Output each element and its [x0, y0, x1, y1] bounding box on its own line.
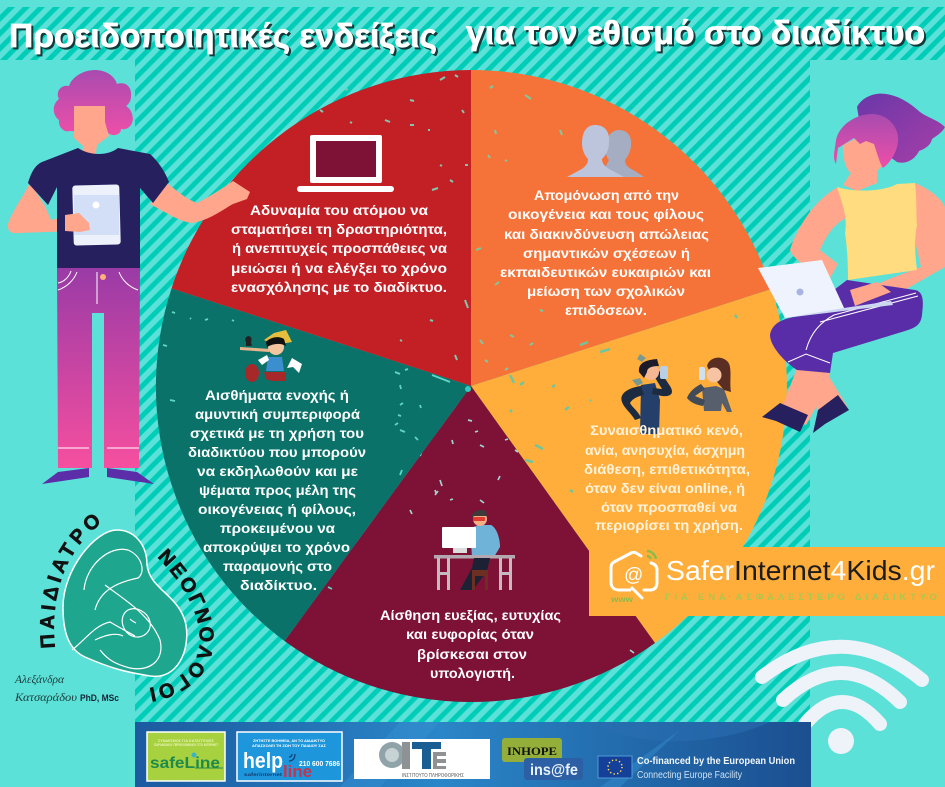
text: red slice: ενασχόλησης με το διαδίκτυο. — [231, 280, 447, 295]
logo: helpline: 210 600 7686 — [299, 759, 340, 768]
logo: helpline: ΖΗΤΗΣΤΕ ΒΟΗΘΕΙΑ, ΑΝ ΤΟ ΔΙΑΔΙΚΤΥΟ — [253, 738, 325, 743]
logo: insafe: ins@fe — [530, 762, 578, 779]
text: co-financing statement — [637, 755, 795, 781]
logo: paediatrician neonatologist: PhD, MSc — [80, 693, 119, 703]
title: Προειδοποιητικές ενδείξεις — [9, 17, 437, 54]
text: red slice: ή ανεπιτυχείς προσπάθειες να — [232, 241, 448, 256]
text: yellow slice: διάθεση, επιθετικότητα, — [584, 462, 750, 477]
logo: safeline: safeLine — [150, 755, 220, 772]
text: teal slice: αμυντική συμπεριφορά — [195, 407, 361, 422]
text: red slice: σταματήσει τη δραστηριότητα, — [231, 222, 447, 237]
logo: safeline: ΣΥΝΔΕΣΜΟΣ ΓΙΑ ΚΑΤΑΓΓΕΛΙΕΣ — [158, 738, 215, 743]
logo: paediatrician neonatologist: Κατσαράδου — [14, 690, 77, 704]
icon: wifi — [762, 647, 922, 754]
text: teal slice: σχετικά με τη χρήση του — [190, 426, 364, 441]
text: teal slice: ψέματα προς μέλη της — [199, 483, 356, 498]
logo: safeline — [147, 732, 225, 781]
t-shirt — [28, 148, 169, 268]
logo: paediatrician neonatologist — [14, 514, 214, 704]
text: yellow slice: περιορίσει τη χρήση. — [595, 518, 743, 533]
text: teal slice: Αισθήματα ενοχής ή — [205, 388, 349, 403]
purple trousers — [770, 280, 923, 373]
text: yellow slice: όταν προσπαθεί να — [601, 500, 738, 515]
logo: ITE — [354, 739, 490, 779]
text: teal slice: διαδικτύου που μπορούν — [188, 445, 366, 460]
curved text — [54, 525, 99, 648]
icon: house with at sign: @ — [624, 565, 643, 586]
text: teal slice — [188, 388, 366, 593]
striped title band — [0, 7, 945, 60]
icon: arguing people on phones — [621, 354, 732, 434]
back hair — [857, 94, 945, 163]
text: red slice: Αδυναμία του ατόμου να — [250, 203, 429, 218]
text: teal slice: να εκδηλωθούν και με — [197, 464, 359, 479]
text: maroon slice: και ευφορίας όταν — [406, 627, 534, 642]
logo: EU flag — [598, 756, 632, 778]
icon: Pinocchio — [240, 330, 302, 382]
text: orange slice: και διακινδύνευση απώλειας — [504, 227, 709, 242]
title — [9, 14, 925, 54]
text: maroon slice: υπολογιστή. — [430, 666, 515, 681]
text: yellow slice: Συναισθηματικό κενό, — [590, 423, 743, 438]
head and neck — [843, 130, 887, 191]
text: yellow slice: ανία, ανησυχία, άσχημη — [585, 443, 745, 458]
wordmark: SaferInternet4Kids.gr — [666, 555, 935, 586]
panel: teal slice — [156, 288, 471, 641]
logo: helpline: saferinternet — [244, 772, 283, 777]
logo: INHOPE — [502, 738, 562, 762]
text: teal slice: παραμονής στο — [223, 559, 332, 574]
hair — [54, 70, 133, 135]
logo: helpline: ΑΠΑΣΧΟΛΕΙ ΤΗ ΖΩΗ ΤΟΥ ΠΑΙΔΙΟΥ ΣΑΣ — [252, 743, 327, 748]
panel: red slice — [172, 70, 471, 386]
front hair — [834, 114, 898, 168]
text: orange slice: σημαντικών σχέσεων ή — [523, 246, 690, 261]
title: για τον εθισμό στο διαδίκτυο — [466, 14, 925, 51]
footer: partner logos bar — [135, 722, 811, 787]
text: orange slice: οικογένεια και τους φίλους — [508, 207, 704, 222]
arms — [790, 183, 945, 306]
text: red slice — [231, 203, 448, 295]
text: orange slice: εκπαιδευτικών ευκαιριών και — [500, 265, 711, 280]
text: orange slice: μείωση των σχολικών — [527, 284, 685, 299]
heart emblem — [63, 530, 187, 676]
text: teal slice: προκειμένου να — [220, 521, 336, 536]
logo: ITE: ΙΝΣΤΙΤΟΥΤΟ ΠΛΗΡΟΦΟΡΙΚΗΣ — [402, 773, 464, 779]
pants — [57, 268, 140, 468]
tagline: ΓΙΑ ΕΝΑ ΑΣΦΑΛΕΣΤΕΡΟ ΔΙΑΔΙΚΤΥΟ — [665, 592, 937, 603]
text: orange slice: Απομόνωση από την — [534, 188, 679, 203]
text: teal slice: οικογένειας ή φίλους, — [198, 502, 356, 517]
panel: orange slice — [471, 70, 772, 386]
logo: paediatrician neonatologist: ΝΕΟΓΝΟΛΟΓΟΙ — [150, 548, 214, 702]
text: co-financing statement: Co-financed by the European Union — [637, 755, 795, 767]
text: maroon slice: βρίσκεσαι στον — [417, 647, 527, 662]
text: red slice: μειώσει ή να ελέγξει το χρόνο — [231, 261, 447, 276]
text: yellow slice: όταν δεν είναι online, ή — [585, 481, 745, 496]
illustration: man with tablet — [8, 70, 250, 484]
logo: helpline: help — [243, 748, 283, 773]
shoes — [42, 468, 154, 484]
icon: laptop — [297, 135, 394, 192]
text: co-financing statement: Connecting Europe Facility — [637, 770, 742, 781]
icon: friends silhouettes — [567, 125, 644, 177]
banner: SaferInternet4Kids — [589, 547, 945, 616]
icon: man at computer — [434, 510, 515, 590]
text: teal slice: διαδίκτυο. — [240, 578, 317, 593]
text: orange slice: επιδόσεων. — [565, 303, 647, 318]
text: yellow slice — [584, 423, 750, 533]
text: maroon slice — [380, 608, 561, 681]
panel: yellow slice — [471, 289, 787, 643]
shoes — [762, 395, 849, 433]
striped central panel — [135, 60, 810, 725]
logo: insafe — [524, 758, 583, 780]
text: maroon slice: Αίσθηση ευεξίας, ευτυχίας — [380, 608, 561, 623]
text: teal slice: αποκρύψει το χρόνο — [203, 540, 350, 555]
pie chart — [156, 70, 787, 702]
arms — [8, 183, 90, 234]
logo: helpline: line — [283, 762, 312, 781]
logo: helpline — [237, 732, 342, 781]
logo: INHOPE: INHOPE — [507, 744, 557, 758]
tablet — [72, 184, 121, 246]
laptop — [758, 260, 845, 318]
yellow top — [837, 183, 917, 280]
text: orange slice — [500, 188, 711, 318]
icon: house with at sign — [610, 551, 657, 604]
icon: house with at sign: www — [610, 595, 634, 604]
panel: maroon slice — [284, 386, 655, 702]
lower legs — [780, 368, 847, 425]
illustration: woman with laptop — [758, 94, 945, 433]
signature: Αλεξάνδρα — [14, 672, 65, 686]
logo: safeline: ΠΑΡΑΝΟΜΟΥ ΠΕΡΙΕΧΟΜΕΝΟΥ ΣΤΟ ΙΝΤΕΡΝΕΤ — [154, 742, 218, 747]
